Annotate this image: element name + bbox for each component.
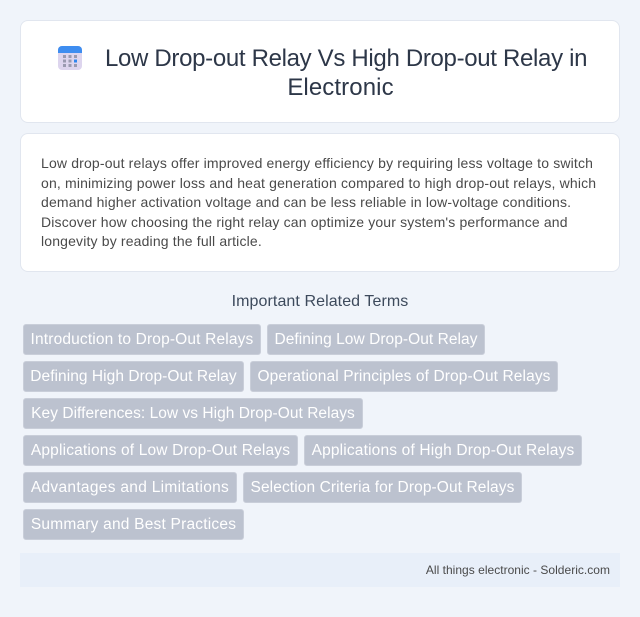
tag — [243, 472, 522, 503]
footer text: All things electronic - Solderic.com — [426, 563, 610, 577]
title: Low Drop-out Relay Vs High Drop-out Relay in — [105, 45, 587, 72]
tag — [267, 324, 485, 355]
panel: header — [20, 20, 620, 123]
tag group: related terms — [23, 324, 582, 540]
tag: Key Differences: Low vs High Drop-Out Relays — [31, 405, 355, 422]
tag: Introduction to Drop-Out Relays — [31, 331, 253, 348]
tag — [23, 361, 244, 392]
tag — [23, 324, 261, 355]
tag — [250, 361, 558, 392]
description text: Discover how choosing the right relay can optimize your system's performance and — [41, 214, 568, 230]
tag: Summary and Best Practices — [31, 516, 236, 533]
title — [105, 45, 587, 101]
description text: on, minimizing power loss and heat generation compared to high drop-out relays, which — [41, 174, 596, 190]
tag — [23, 435, 298, 466]
footer bar — [20, 553, 620, 587]
panel: description — [20, 133, 620, 272]
icon: calendar grid — [58, 46, 82, 70]
tag: Operational Principles of Drop-Out Relays — [257, 368, 551, 385]
description text: longevity by reading the full article. — [41, 233, 262, 249]
tag — [304, 435, 582, 466]
title: Electronic — [287, 74, 394, 101]
heading: important related terms: Important Related Terms — [232, 293, 408, 310]
tag: Advantages and Limitations — [31, 479, 229, 496]
description text: demand higher activation voltage and can be less reliable in low-voltage conditions. — [41, 194, 571, 210]
tag: Applications of Low Drop-Out Relays — [31, 442, 290, 459]
tag — [23, 398, 363, 429]
tag — [23, 472, 237, 503]
description text — [41, 155, 596, 249]
tag: Selection Criteria for Drop-Out Relays — [251, 479, 514, 496]
description text: Low drop-out relays offer improved energy efficiency by requiring less voltage to switch — [41, 155, 593, 171]
tag: Defining Low Drop-Out Relay — [274, 331, 478, 348]
tag — [23, 509, 244, 540]
tag: Applications of High Drop-Out Relays — [312, 442, 574, 459]
tag: Defining High Drop-Out Relay — [30, 368, 237, 385]
